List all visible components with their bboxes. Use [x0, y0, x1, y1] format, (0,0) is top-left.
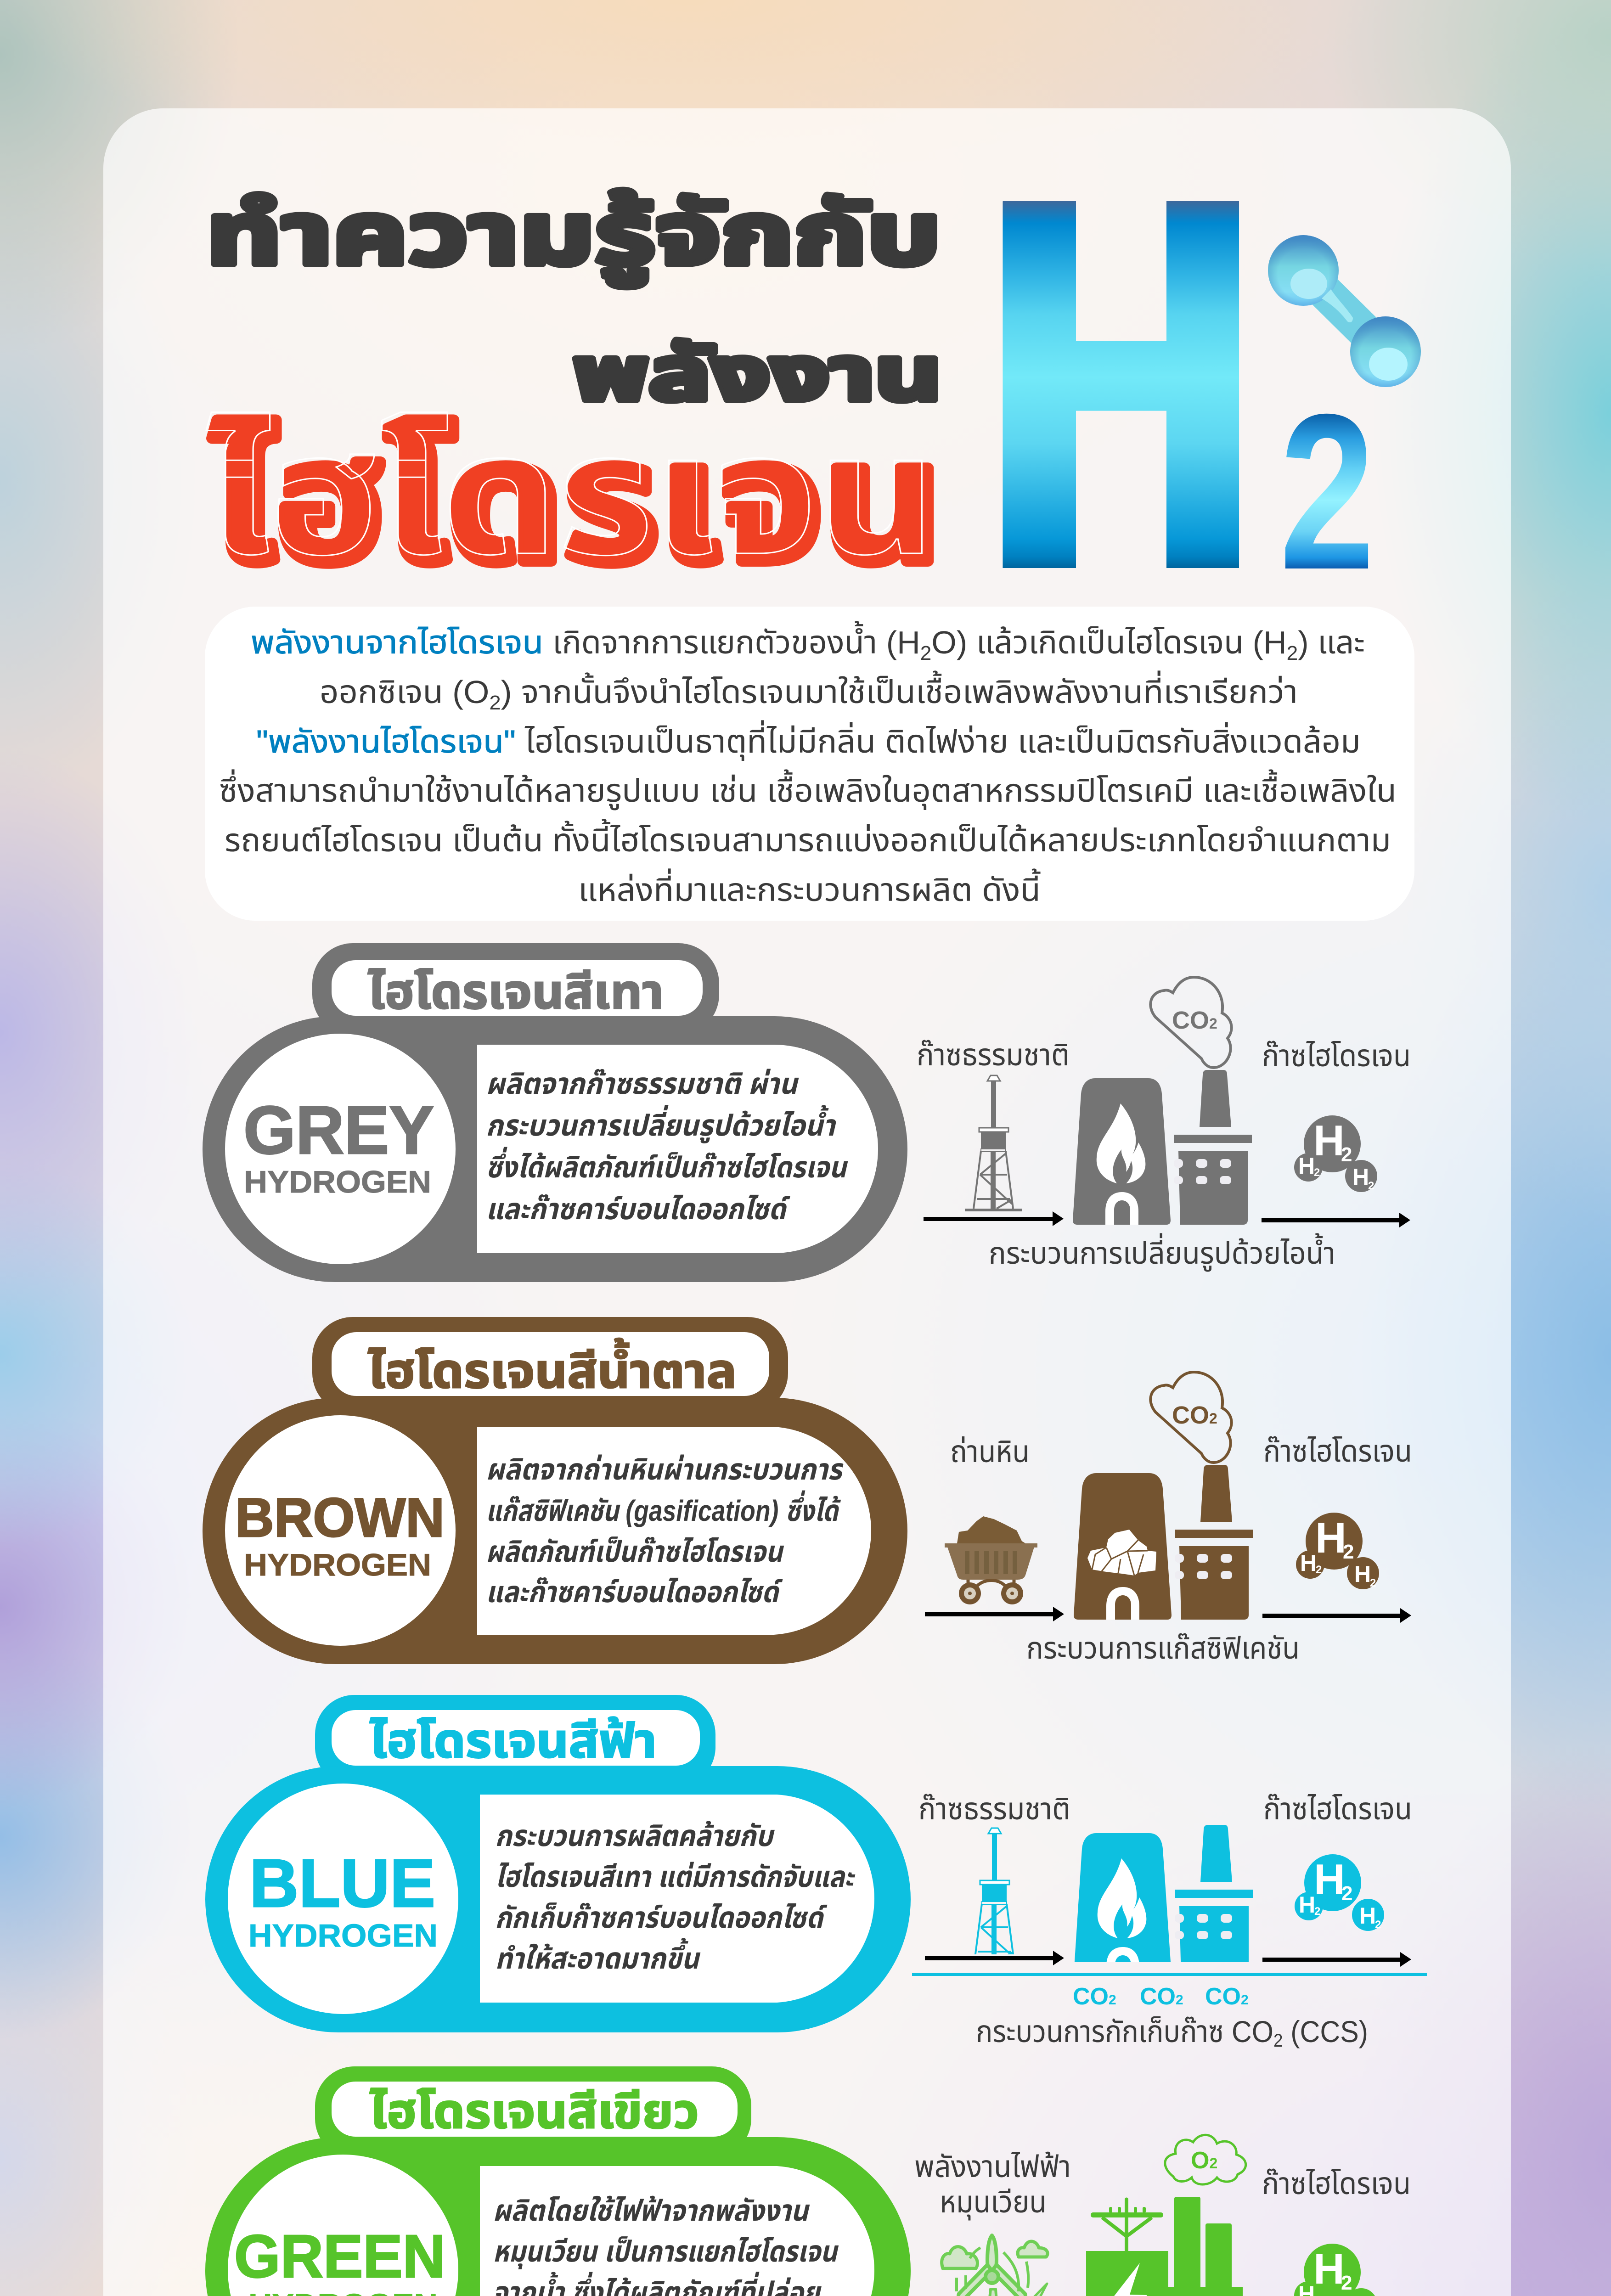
intro paragraph: รถยนต์ไฮโดรเจน เป็นต้น ทั้งนี้ไฮโดรเจนสามารถแบ่งออกเป็นได้หลายประเภทโดยจำแนกตาม — [225, 819, 1391, 858]
green badge: GREEN — [234, 2223, 445, 2290]
grey badge: GREY — [243, 1092, 434, 1168]
icon: hydrogen molecules: H — [1298, 1153, 1315, 1179]
icon: hydrogen molecules: 2 — [1314, 1905, 1320, 1918]
icon: hydrogen molecules — [1294, 2244, 1377, 2296]
green pill — [205, 2137, 911, 2296]
icon: factory with flame — [1075, 1825, 1253, 1962]
blue description: ทำให้สะอาดมากขึ้น — [495, 1938, 701, 1975]
label: coal: ถ่านหิน — [950, 1435, 1030, 1469]
icon: coal rock — [1087, 1530, 1156, 1576]
captured CO2 labels — [1073, 1983, 1249, 2010]
blue description: กระบวนการผลิตคล้ายกับ — [495, 1819, 775, 1852]
green description: หมุนเวียน เป็นการแยกไฮโดรเจน — [493, 2235, 839, 2269]
icon: hydrogen molecules — [1294, 1115, 1377, 1192]
process label: กระบวนการแก๊สซิฟิเคชัน — [1026, 1631, 1300, 1665]
blue badge — [228, 1784, 458, 2014]
process: blue hydrogen — [912, 1792, 1427, 2051]
intro text box — [205, 607, 1414, 921]
title: ไฮโดรเจน — [206, 400, 936, 590]
O2 cloud — [1165, 2135, 1246, 2184]
brown badge — [225, 1415, 456, 1646]
icon: hydrogen molecule — [1268, 235, 1421, 387]
icon: hydrogen molecules: H — [1354, 1561, 1371, 1587]
green description: ผลิตโดยใช้ไฟฟ้าจากพลังงาน — [493, 2194, 810, 2227]
process label: กระบวนการเปลี่ยนรูปด้วยไอน้ำ — [989, 1233, 1335, 1272]
brown badge: BROWN — [235, 1487, 445, 1548]
icon: hydrogen molecules: H — [1359, 1903, 1376, 1929]
grey description: ซึ่งได้ผลิตภัณฑ์เป็นก๊าซไฮโดรเจน — [486, 1147, 848, 1184]
title: ไฮโดรเจน — [212, 408, 942, 597]
H2 logo: 2 — [1279, 368, 1375, 616]
process label: (CCS) — [1283, 2015, 1368, 2048]
title: พลังงาน — [573, 332, 942, 416]
label: hydrogen gas: ก๊าซไฮโดรเจน — [1262, 1039, 1411, 1073]
intro paragraph: พลังงานจากไฮโดรเจน — [251, 625, 543, 660]
title — [206, 186, 942, 597]
icon: hydrogen molecules: 2 — [1368, 1180, 1374, 1192]
icon: hydrogen molecules: H — [1352, 1164, 1369, 1190]
arrow in — [924, 1211, 1064, 1226]
intro paragraph: O) แล้วเกิดเป็นไฮโดรเจน (H — [931, 625, 1287, 660]
grey description — [477, 1045, 878, 1253]
icon: hydrogen molecules: H — [1313, 2245, 1345, 2293]
intro paragraph: 2 — [920, 642, 931, 664]
arrow out — [1262, 1213, 1410, 1227]
title: ทำความรู้จักกับ — [206, 186, 941, 287]
icon: hydrogen molecules: H — [1313, 1116, 1345, 1165]
brown description — [477, 1427, 871, 1635]
CO2 cloud: CO2 — [1172, 1401, 1217, 1429]
intro paragraph: ซึ่งสามารถนำมาใช้งานได้หลายรูปแบบ เช่น เชื้อเพลิงในอุตสาหกรรมปิโตรเคมี และเชื้อเพลิงใน — [219, 769, 1397, 810]
brown pill — [203, 1398, 907, 1664]
blue description: ไฮโดรเจนสีเทา แต่มีการดักจับและ — [495, 1860, 856, 1893]
icon: hydrogen molecules: H — [1299, 1892, 1315, 1918]
grey heading tab — [312, 943, 719, 1035]
panel: brown hydrogen — [203, 1317, 907, 1664]
icon: hydrogen molecules — [1296, 1513, 1379, 1589]
icon: factory with coal — [1074, 1465, 1253, 1620]
green badge — [228, 2155, 458, 2296]
label: hydrogen gas: ก๊าซไฮโดรเจน — [1262, 2167, 1411, 2200]
label: renewable electricity — [914, 2150, 1071, 2220]
green heading tab — [315, 2066, 751, 2158]
icon: electric factory — [1086, 2197, 1243, 2296]
panel: grey hydrogen — [203, 943, 907, 1282]
icon: hydrogen molecules: H — [1315, 1514, 1346, 1562]
brown badge: HYDROGEN — [244, 1548, 431, 1582]
label: natural gas: ก๊าซธรรมชาติ — [918, 1792, 1070, 1826]
label: hydrogen gas: ก๊าซไฮโดรเจน — [1263, 1434, 1412, 1468]
blue description — [480, 1795, 874, 2003]
blue pill — [205, 1766, 911, 2032]
grey description: กระบวนการเปลี่ยนรูปด้วยไอน้ำ — [486, 1105, 836, 1143]
CO2 cloud — [1150, 977, 1232, 1068]
brown description: ผลิตจากถ่านหินผ่านกระบวนการ — [486, 1453, 844, 1486]
grey pill — [203, 1016, 907, 1282]
arrow out — [1262, 1608, 1411, 1623]
icon: factory with flame — [1073, 1070, 1252, 1225]
label: natural gas: ก๊าซธรรมชาติ — [917, 1038, 1070, 1072]
icon: hydrogen molecules: H — [1300, 1550, 1317, 1576]
brown description: แก๊สซิฟิเคชัน (gasification) ซึ่งได้ — [486, 1490, 841, 1527]
green description — [480, 2166, 874, 2296]
CO2 cloud — [1150, 1372, 1232, 1463]
icon: hydrogen molecules: 2 — [1375, 1919, 1381, 1931]
icon: hydrogen molecules: 2 — [1316, 1564, 1322, 1576]
intro paragraph: ออกซิเจน (O — [320, 674, 484, 710]
intro paragraph: 2 — [1287, 642, 1298, 664]
icon: hydrogen molecules — [1295, 1854, 1384, 1931]
process: brown hydrogen — [925, 1372, 1412, 1665]
panel: green hydrogen — [205, 2066, 911, 2296]
grey description: และก๊าซคาร์บอนไดออกไซด์ — [486, 1193, 790, 1226]
panel: blue hydrogen — [205, 1695, 911, 2032]
icon: hydrogen molecules: 2 — [1341, 1882, 1352, 1905]
grey badge — [225, 1034, 456, 1264]
process: green hydrogen — [914, 2135, 1411, 2296]
grey badge: HYDROGEN — [244, 1165, 431, 1199]
arrow in — [925, 1951, 1064, 1965]
label: renewable electricity: หมุนเวียน — [940, 2185, 1047, 2220]
intro paragraph: 2 — [489, 692, 501, 714]
process label: กระบวนการกักเก็บก๊าซ CO — [976, 2015, 1299, 2048]
blue badge: HYDROGEN — [248, 1918, 438, 1953]
intro paragraph: เกิดจากการแยกตัวของน้ำ (H — [552, 625, 919, 660]
intro paragraph: ไฮโดรเจนเป็นธาตุที่ไม่มีกลิ่น ติดไฟง่าย และเป็นมิตรกับสิ่งแวดล้อม — [524, 720, 1361, 761]
grey description: ผลิตจากก๊าซธรรมชาติ ผ่าน — [486, 1067, 799, 1100]
arrow out — [1262, 1952, 1411, 1967]
brown description: ผลิตภัณฑ์เป็นก๊าซไฮโดรเจน — [486, 1535, 784, 1568]
intro paragraph — [219, 621, 1397, 908]
icon: hydrogen molecules: 2 — [1341, 1143, 1352, 1166]
icon: gas tower — [974, 1828, 1014, 1954]
process label: 2 — [1273, 2031, 1283, 2051]
process: grey hydrogen — [917, 977, 1411, 1272]
icon: wind turbine — [942, 2235, 1048, 2296]
brown heading tab: ไฮโดรเจนสีน้ำตาล — [368, 1338, 737, 1398]
intro paragraph: ) และ — [1298, 625, 1365, 660]
green heading tab: ไฮโดรเจนสีเขียว — [370, 2085, 699, 2138]
label: hydrogen gas: ก๊าซไฮโดรเจน — [1263, 1792, 1412, 1826]
arrow in — [925, 1607, 1064, 1621]
brown heading tab — [312, 1317, 788, 1413]
captured CO2 labels: CO2 — [1140, 1983, 1183, 2010]
blue heading tab: ไฮโดรเจนสีฟ้า — [370, 1715, 657, 1768]
CO2 cloud: CO2 — [1172, 1007, 1217, 1034]
captured CO2 labels: CO2 — [1073, 1983, 1116, 2010]
blue heading tab — [315, 1695, 715, 1787]
blue badge: BLUE — [249, 1846, 435, 1921]
icon: gas tower — [965, 1075, 1022, 1211]
label: renewable electricity: พลังงานไฟฟ้า — [914, 2150, 1071, 2183]
icon: hydrogen molecules: 2 — [1314, 1166, 1320, 1179]
icon: hydrogen molecules: 2 — [1341, 2272, 1352, 2294]
icon: coal cart — [945, 1516, 1037, 1604]
O2 cloud: O2 — [1191, 2147, 1217, 2174]
CCS line — [912, 1973, 1427, 1976]
intro paragraph: แหล่งที่มาและกระบวนการผลิต ดังนี้ — [578, 868, 1041, 908]
H2 logo: H — [976, 86, 1266, 681]
intro paragraph: ) จากนั้นจึงนำไฮโดรเจนมาใช้เป็นเชื้อเพลิงพลังงานที่เราเรียกว่า — [501, 670, 1298, 710]
brown description: และก๊าซคาร์บอนไดออกไซด์ — [486, 1576, 783, 1609]
captured CO2 labels: CO2 — [1205, 1983, 1249, 2010]
icon: hydrogen molecules: 2 — [1343, 1541, 1354, 1563]
icon: hydrogen molecules: H — [1314, 1855, 1345, 1903]
intro paragraph: "พลังงานไฮโดรเจน" — [256, 724, 516, 760]
icon: hydrogen molecules: 2 — [1370, 1577, 1376, 1589]
blue description: กักเก็บก๊าซคาร์บอนไดออกไซด์ — [495, 1901, 828, 1934]
grey heading tab: ไฮโดรเจนสีเทา — [368, 966, 664, 1019]
